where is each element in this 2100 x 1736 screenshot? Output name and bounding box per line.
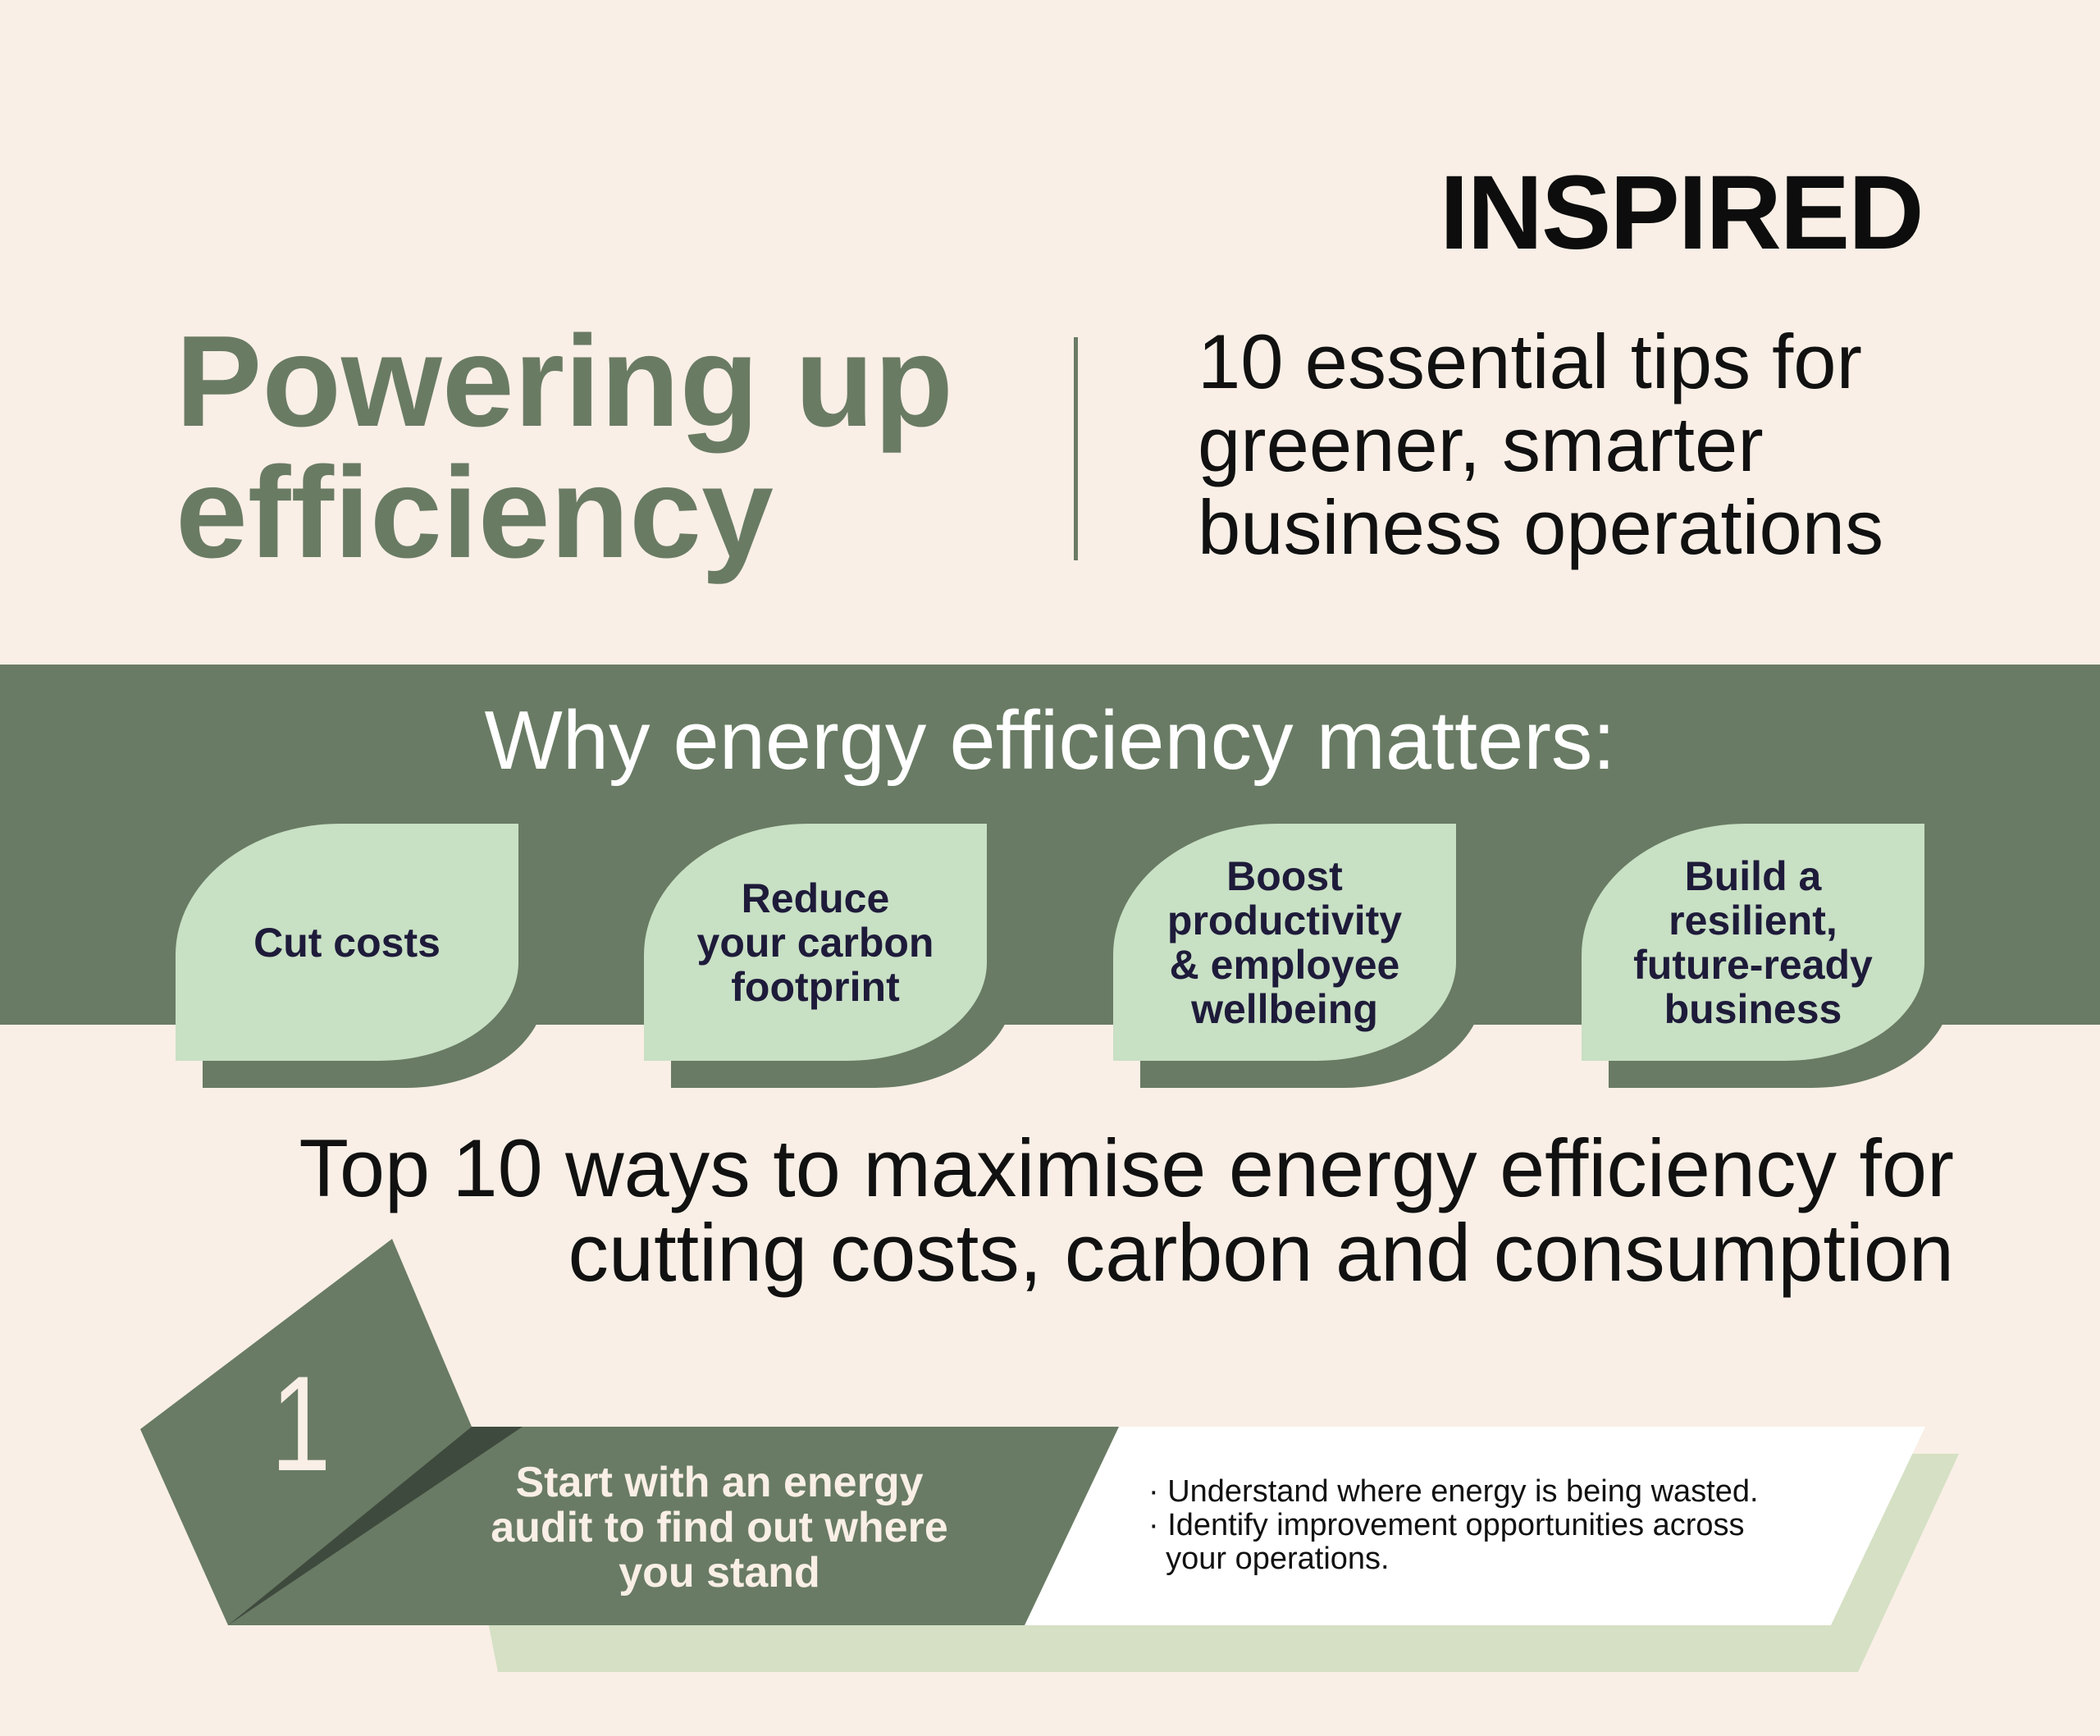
card: productivity: & employee (1170, 942, 1399, 988)
dark stripe (228, 1427, 523, 1625)
card: resilient: Build a (1685, 853, 1821, 899)
card: cut costs: Cut costs (253, 919, 441, 965)
subtitle: 10 essential tips for (1198, 318, 1862, 404)
card: productivity (1167, 853, 1402, 1032)
card: resilient: resilient, (1669, 898, 1838, 943)
section heading: cutting costs, carbon and consumption (568, 1207, 1954, 1298)
subtitle: greener, smarter (1198, 401, 1764, 487)
card: resilient: business (1664, 986, 1842, 1032)
card shadows (203, 851, 1952, 1088)
subtitle (1198, 318, 1883, 570)
tip bullets: · Understand where energy is being wasted. (1148, 1474, 1759, 1509)
logo: INSPIRED: INSPIRED (1440, 154, 1923, 272)
card: productivity: Boost (1226, 853, 1343, 899)
section heading: Top 10 ways to maximise energy efficiency for (299, 1122, 1954, 1213)
card: carbon: footprint (731, 963, 900, 1009)
tip title: you stand (619, 1549, 820, 1597)
band heading: Why energy efficiency matters: (484, 695, 1616, 787)
card: carbon (697, 875, 934, 1009)
green band (0, 665, 2100, 1025)
tip number: 1 (271, 1348, 331, 1499)
light green shadow (455, 1454, 1959, 1672)
card: carbon: your carbon (697, 919, 934, 965)
title (176, 309, 953, 585)
section heading (299, 1122, 1954, 1298)
green number shape (140, 1239, 1119, 1625)
white details panel (1025, 1427, 1925, 1625)
card: resilient (1633, 853, 1873, 1032)
card shapes (176, 824, 1924, 1061)
card: productivity: productivity (1167, 898, 1402, 943)
subtitle: business operations (1198, 484, 1883, 570)
title: Powering up (176, 309, 953, 454)
card: resilient: future-ready (1633, 942, 1873, 988)
card: productivity: wellbeing (1191, 986, 1378, 1032)
tip title (491, 1459, 948, 1597)
tip bullets (1148, 1474, 1759, 1576)
tip bullets: · Identify improvement opportunities across (1148, 1508, 1745, 1542)
title: efficiency (176, 441, 774, 585)
tip bullets: your operations. (1166, 1542, 1390, 1576)
tip title: Start with an energy (515, 1459, 924, 1506)
card: carbon: Reduce (742, 875, 889, 921)
tip title: audit to find out where (491, 1504, 948, 1551)
divider line (1074, 337, 1078, 560)
